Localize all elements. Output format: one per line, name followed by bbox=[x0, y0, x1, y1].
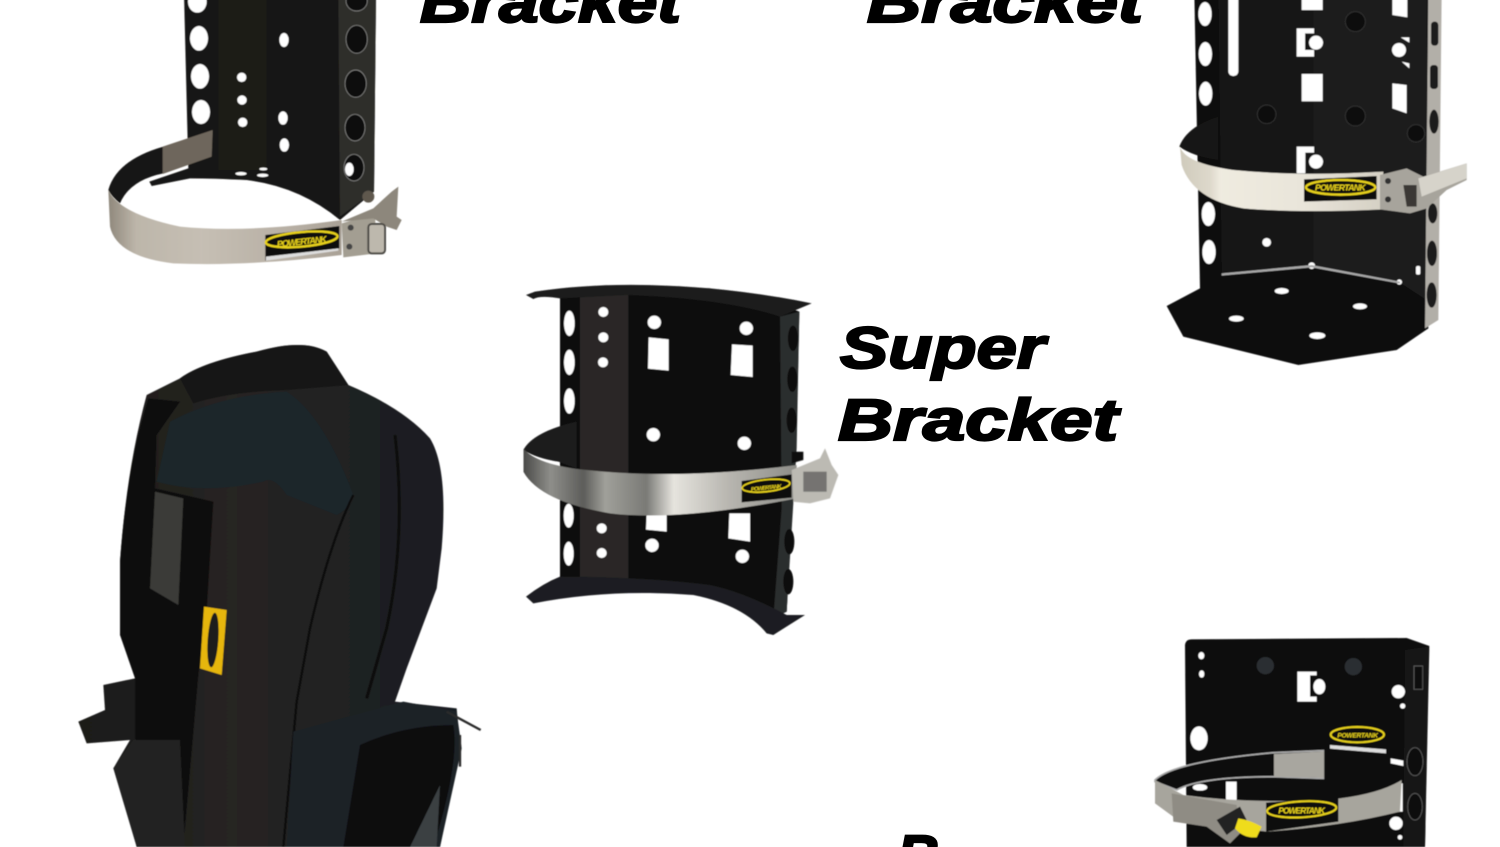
latch bbox=[1380, 163, 1467, 213]
strap back and tab bbox=[108, 147, 163, 203]
latch with yellow knob bbox=[1172, 793, 1262, 843]
strap front bbox=[1155, 780, 1402, 832]
strap label: POWERTANK bbox=[1315, 183, 1366, 193]
top handle bbox=[180, 345, 348, 403]
product: narrow bracket with strap, top left bbox=[108, 0, 402, 265]
heading: Super Bracket label: Bracket bbox=[838, 388, 1122, 453]
curved bottom flange bbox=[526, 577, 805, 635]
heading: Super Bracket label: Super bbox=[840, 316, 1049, 381]
strap label bbox=[1304, 176, 1377, 202]
lower side pouch bbox=[113, 740, 185, 847]
flange holes bbox=[1407, 666, 1423, 820]
decal on plate bbox=[1330, 727, 1386, 753]
side flange bbox=[1403, 647, 1428, 847]
product: tall bracket with octagon base, top right bbox=[1166, 0, 1468, 366]
latch bbox=[342, 187, 402, 257]
flange slots bbox=[1427, 22, 1439, 308]
right silver flange bbox=[1425, 0, 1442, 328]
product: black tank carry backpack, lower left bbox=[78, 344, 482, 847]
right flange dark holes bbox=[344, 0, 367, 181]
strap label: POWERTANK bbox=[751, 484, 783, 493]
strap label bbox=[1266, 797, 1338, 832]
strap back bbox=[523, 422, 577, 468]
heading: Super Bracket label bbox=[838, 316, 1122, 453]
plate holes bbox=[1190, 652, 1405, 840]
product: flat wall bracket with strap, lower right bbox=[1154, 637, 1430, 847]
decal on plate: POWERTANK bbox=[1337, 732, 1379, 739]
strap label: POWERTANK bbox=[1278, 805, 1326, 815]
bag silhouette bbox=[78, 345, 460, 847]
bolts bbox=[1257, 657, 1362, 675]
strap label bbox=[265, 226, 339, 261]
bracket body and octagonal base bbox=[1167, 0, 1428, 365]
upper blue-grey panel bbox=[157, 392, 353, 515]
strap label bbox=[742, 474, 792, 502]
bracket body bbox=[149, 0, 376, 220]
flange holes bbox=[188, 0, 289, 177]
back plate bbox=[1185, 638, 1429, 847]
curved top flange bbox=[526, 285, 812, 317]
strap front bbox=[523, 448, 797, 516]
white cut-outs bbox=[1198, 0, 1420, 285]
side zipper seam bbox=[367, 435, 399, 698]
strap front bbox=[108, 190, 342, 264]
front pocket bbox=[287, 702, 481, 847]
yellow logo tag bbox=[200, 607, 227, 675]
grey strap gap bbox=[150, 492, 183, 605]
strap back bbox=[1179, 117, 1218, 160]
base holes and seam bbox=[1222, 265, 1400, 339]
bolts bbox=[1257, 12, 1425, 142]
shoulder strap bbox=[120, 398, 213, 847]
silver tab bbox=[1274, 751, 1324, 778]
right flange holes bbox=[783, 326, 798, 594]
latch bbox=[792, 448, 838, 503]
strap label: POWERTANK bbox=[276, 234, 329, 249]
strap back bbox=[1155, 751, 1323, 790]
bracket body bbox=[560, 288, 799, 618]
strap front bbox=[1180, 147, 1383, 211]
white holes bbox=[564, 307, 753, 566]
product: Super Bracket with curved flanges, centre bbox=[522, 284, 839, 636]
